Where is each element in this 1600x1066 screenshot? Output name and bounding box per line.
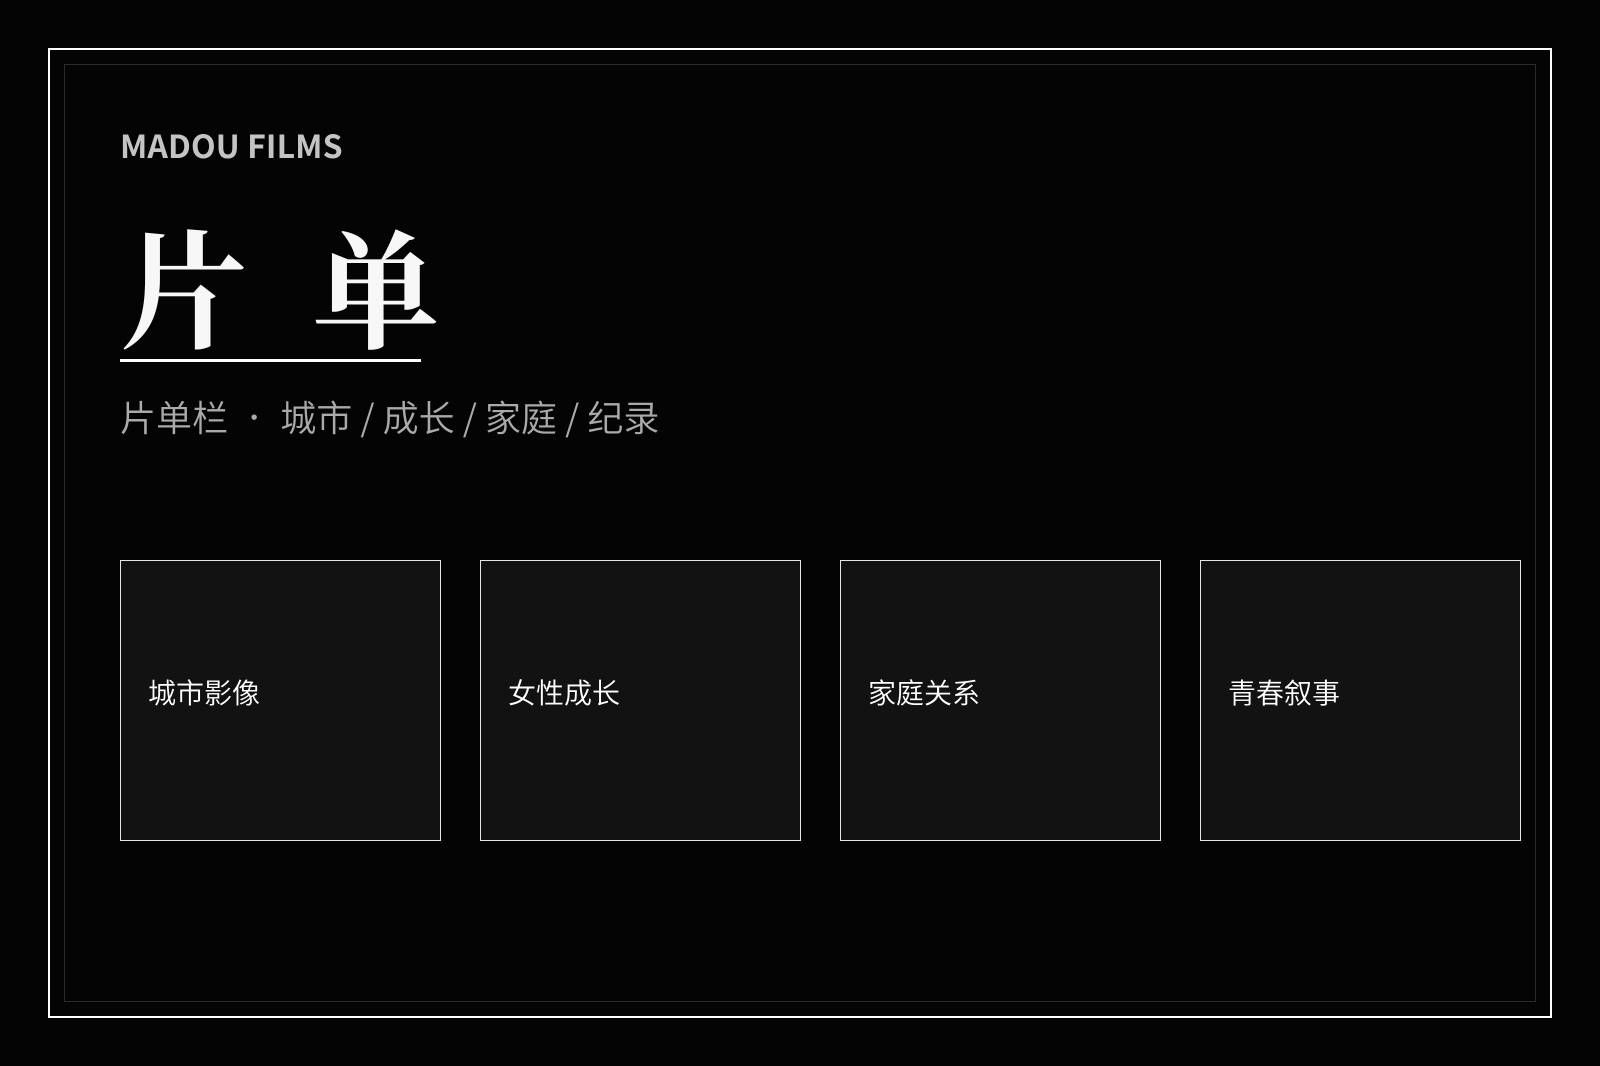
subtitle: 片单栏 城市 / 成长 / 家庭 / 纪录 (120, 390, 659, 442)
card: 家庭关系: 家庭关系 (868, 672, 980, 712)
card: 青春叙事: 青春叙事 (1228, 672, 1340, 712)
card: 女性成长: 女性成长 (508, 672, 620, 712)
card: 女性成长 (480, 560, 801, 841)
card: 城市影像 (120, 560, 441, 841)
subtitle: · (241, 398, 267, 435)
title: 片单 (120, 191, 504, 375)
brand label: MADOU FILMS (120, 122, 343, 168)
card: 家庭关系 (840, 560, 1161, 841)
card: 城市影像: 城市影像 (148, 672, 260, 712)
title underline (120, 359, 421, 362)
card: 青春叙事 (1200, 560, 1521, 841)
